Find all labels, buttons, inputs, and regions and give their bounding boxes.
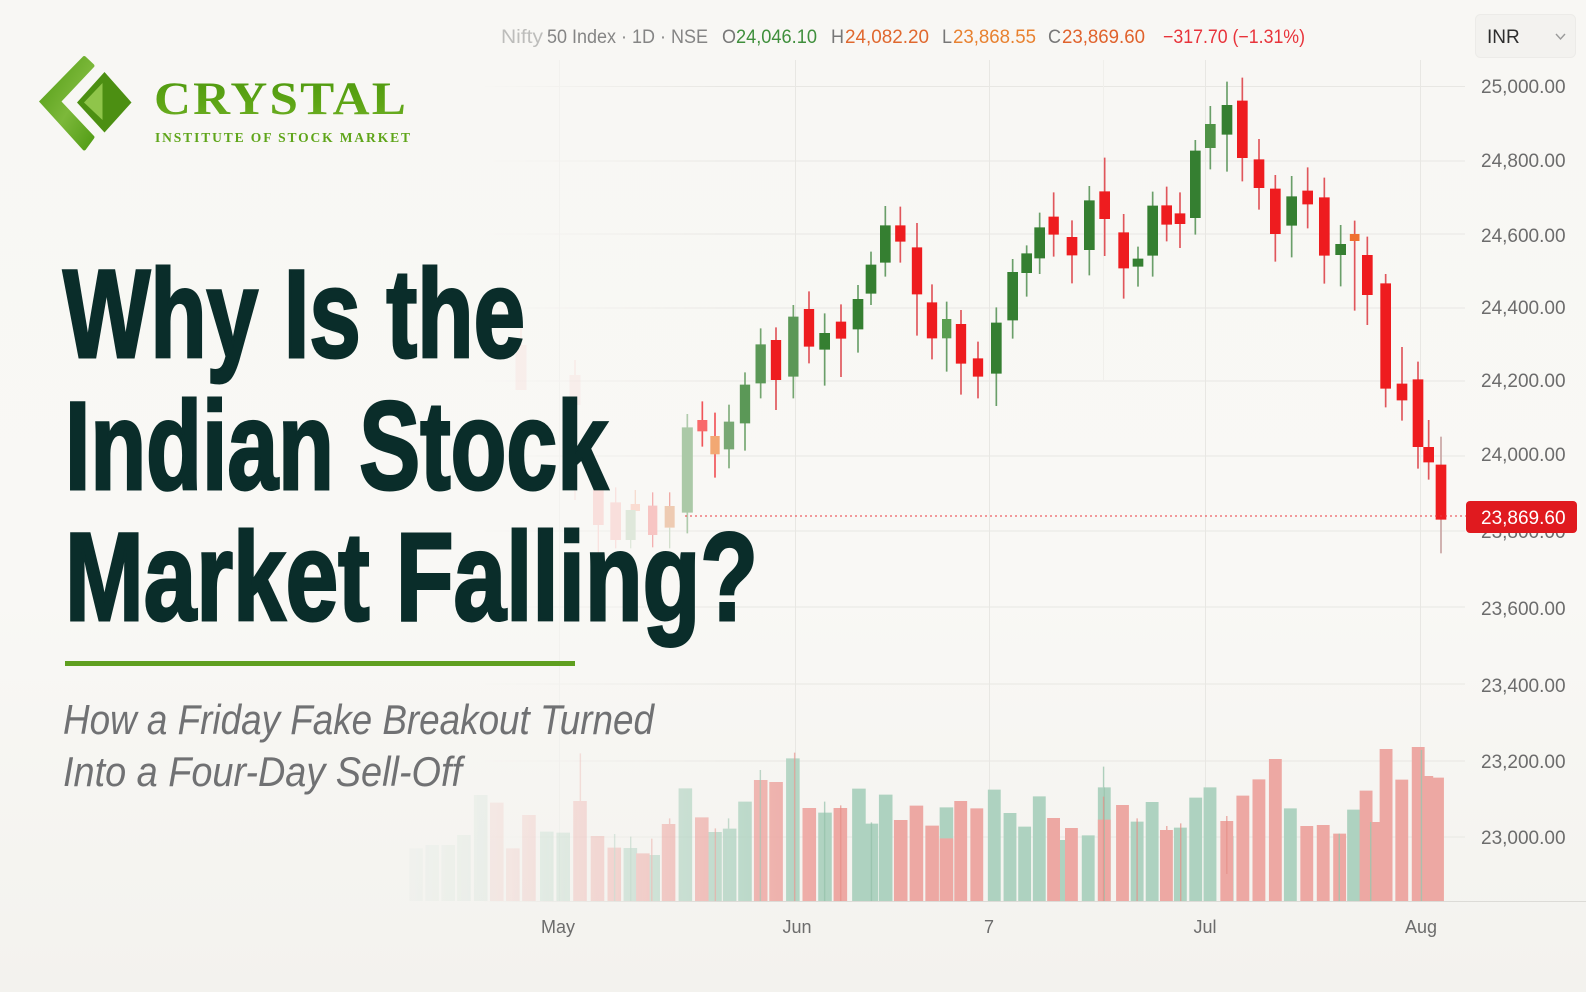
price axis labels — [1481, 77, 1566, 849]
volume bars — [416, 747, 1437, 901]
current price tag — [1466, 501, 1577, 533]
month axis labels: 7 — [984, 917, 994, 937]
month axis labels — [541, 917, 1437, 937]
month axis labels: Jun — [782, 917, 812, 937]
chart header: symbol and OHLC values: 23,869.60 — [1062, 27, 1145, 48]
subtitle: Into a Four-Day Sell-Off — [63, 748, 466, 795]
chart header: symbol and OHLC values: O — [722, 27, 736, 48]
volume bars: June to August — [961, 747, 1437, 901]
chart header: symbol and OHLC values: C — [1048, 27, 1061, 48]
chart header: symbol and OHLC values: L — [942, 27, 952, 48]
price axis labels: 25,000.00 — [1481, 77, 1566, 98]
subtitle — [63, 696, 655, 795]
price axis labels: 24,600.00 — [1481, 226, 1566, 247]
price axis labels: 24,000.00 — [1481, 445, 1566, 466]
chart header: symbol and OHLC values — [501, 27, 1305, 48]
chart header: symbol and OHLC values: 50 Index · 1D · NSE — [547, 27, 708, 48]
subtitle: How a Friday Fake Breakout Turned — [63, 696, 655, 743]
title: Indian Stock — [65, 377, 608, 516]
current price tag: 23,869.60 — [1481, 508, 1566, 529]
chart header: symbol and OHLC values: −317.70 (−1.31%) — [1163, 27, 1305, 48]
title — [63, 245, 758, 647]
title: Why Is the — [63, 245, 525, 384]
candlesticks: faded left cluster — [598, 401, 729, 560]
price axis labels: 23,000.00 — [1481, 828, 1566, 849]
chart header: symbol and OHLC values: 24,082.20 — [845, 27, 929, 48]
candlesticks: July peak and August sell-off — [1072, 78, 1441, 553]
month axis labels: Aug — [1405, 917, 1437, 937]
chart header: symbol and OHLC values: Nifty — [501, 27, 544, 48]
title: Market Falling? — [65, 508, 758, 647]
month axis labels: Jul — [1193, 917, 1217, 937]
wordmark: CRYSTAL — [154, 73, 408, 125]
currency dropdown — [1476, 14, 1576, 58]
chart header: symbol and OHLC values: 23,868.55 — [953, 27, 1036, 48]
tagline: INSTITUTE OF STOCK MARKET — [155, 130, 410, 145]
price axis labels: 24,200.00 — [1481, 371, 1566, 392]
price axis labels: 24,800.00 — [1481, 151, 1566, 172]
volume bars: May to June — [416, 753, 946, 901]
faint candles behind title — [521, 320, 575, 500]
price axis labels: 23,200.00 — [1481, 752, 1566, 773]
icon: green diamond chevron — [39, 56, 132, 150]
month axis labels: May — [541, 917, 575, 937]
price axis labels: 23,400.00 — [1481, 676, 1566, 697]
price axis labels: 23,800.00 — [1481, 522, 1566, 543]
title underline — [65, 661, 575, 666]
candlesticks: June rally and pullback — [745, 192, 1054, 451]
logo: Crystal Institute of Stock Market — [39, 56, 410, 150]
currency dropdown: INR — [1487, 27, 1520, 48]
current price line — [685, 515, 1466, 517]
chart header: symbol and OHLC values: 24,046.10 — [736, 27, 817, 48]
price axis labels: 24,400.00 — [1481, 298, 1566, 319]
price axis labels: 23,600.00 — [1481, 599, 1566, 620]
chart header: symbol and OHLC values: H — [831, 27, 844, 48]
